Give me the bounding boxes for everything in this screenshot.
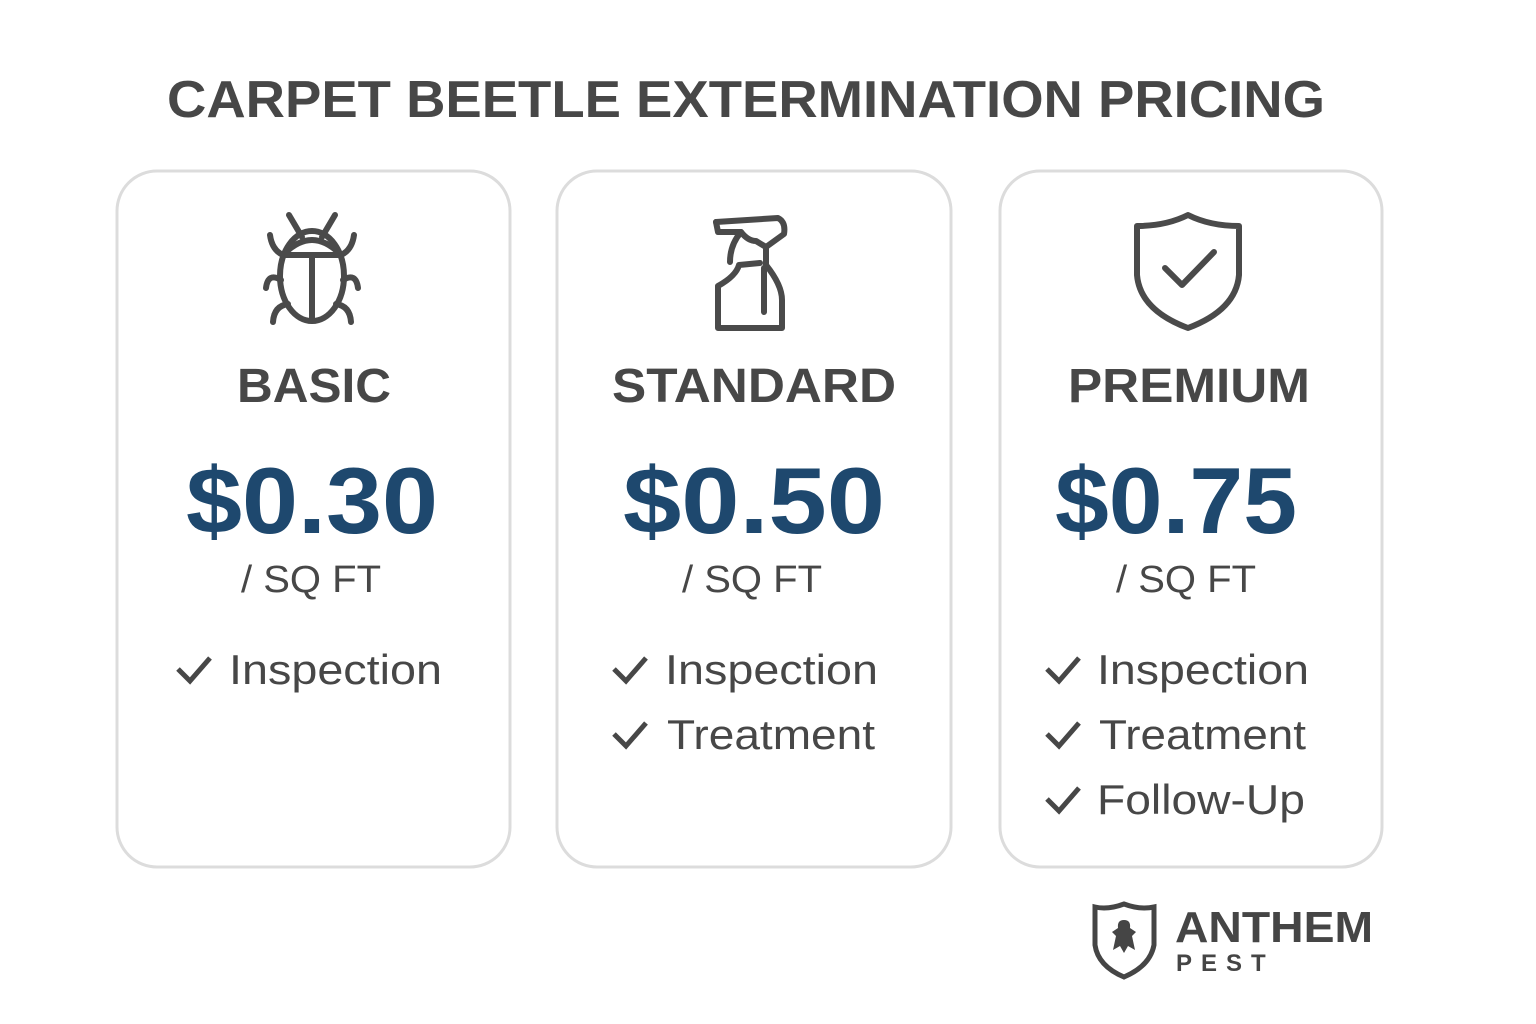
price: premium: $0.75 — [1055, 448, 1297, 553]
feature list: premium: Inspection — [1097, 646, 1309, 693]
feature list: premium — [1047, 646, 1309, 823]
logo: anthem pest: ANTHEM — [1175, 903, 1373, 952]
feature list: premium: Treatment — [1099, 711, 1306, 758]
icon: shield check — [1137, 215, 1239, 328]
unit: / SQ FT — [1116, 559, 1256, 601]
feature list: standard: Inspection — [665, 646, 878, 693]
icon: logo shield — [1095, 904, 1154, 977]
feature list: standard: Treatment — [667, 711, 875, 758]
feature list: basic: Inspection — [229, 646, 442, 693]
panel: premium — [1000, 171, 1382, 867]
feature list: standard — [614, 646, 878, 758]
panel: basic — [117, 171, 510, 867]
unit: / SQ FT — [241, 559, 381, 601]
tier name: premium: PREMIUM — [1068, 360, 1310, 413]
logo: anthem pest: PEST — [1176, 950, 1275, 977]
tier name: basic: BASIC — [237, 360, 391, 413]
tier name: standard: STANDARD — [612, 360, 896, 413]
feature list: premium: Follow-Up — [1097, 776, 1305, 823]
icon: beetle — [266, 215, 358, 322]
title: CARPET BEETLE EXTERMINATION PRICING — [167, 71, 1325, 129]
logo: anthem pest — [1095, 903, 1373, 977]
unit: / SQ FT — [682, 559, 822, 601]
panel: standard — [557, 171, 951, 867]
icon: spray bottle — [716, 218, 784, 328]
price: basic: $0.30 — [186, 448, 438, 553]
price: standard: $0.50 — [623, 448, 885, 553]
